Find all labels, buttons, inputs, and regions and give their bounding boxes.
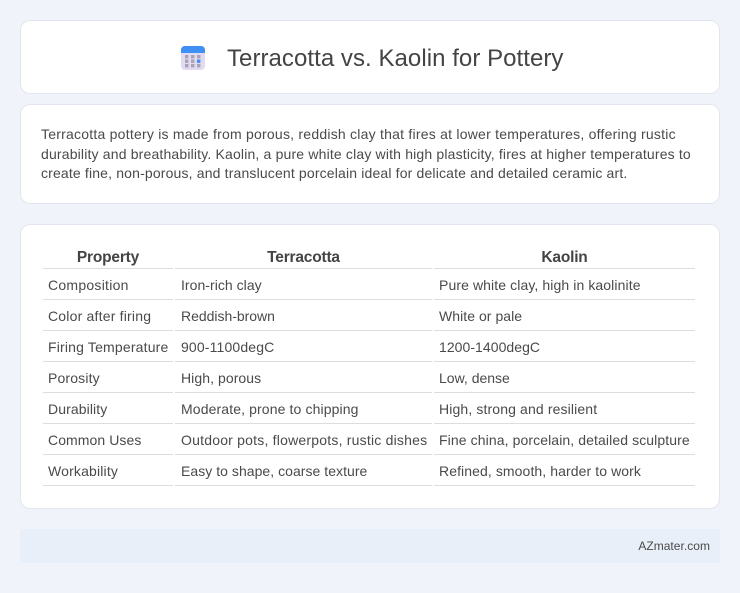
table header: Property: Property [77, 249, 139, 266]
row: Porosity: Low, dense [439, 370, 510, 386]
row: Porosity: Porosity [48, 370, 100, 386]
row: Workability: Easy to shape, coarse texture [181, 463, 367, 479]
row: Workability: Refined, smooth, harder to work [439, 463, 641, 479]
text block: summary: Terracotta pottery is made from porous, reddish clay that fires at lower temperatures, offering rustic [41, 126, 676, 142]
row: Workability: Workability [48, 463, 118, 479]
table header: Terracotta [175, 248, 432, 269]
footer bar [20, 529, 720, 563]
row: Workability [43, 463, 695, 486]
row: Porosity: High, porous [181, 370, 261, 386]
row: Durability [43, 401, 695, 424]
panel: description [20, 104, 720, 204]
row: Color after firing: Color after firing [48, 308, 151, 324]
icon: calendar grid [181, 46, 205, 70]
panel: comparison table [20, 224, 720, 509]
table header: Terracotta: Terracotta [267, 249, 340, 266]
table header: Property [43, 248, 173, 269]
row: Composition: Pure white clay, high in kaolinite [439, 277, 641, 293]
row: Durability: Moderate, prone to chipping [181, 401, 359, 417]
row: Composition: Composition [48, 277, 129, 293]
row: Color after firing [43, 308, 695, 331]
row: Composition [43, 277, 695, 300]
row: Firing Temperature: 900-1100degC [181, 339, 274, 355]
table header: Kaolin [434, 248, 695, 269]
row: Common Uses: Outdoor pots, flowerpots, rustic dishes [181, 432, 427, 448]
table header: Kaolin: Kaolin [541, 249, 588, 266]
text block: summary: create fine, non-porous, and translucent porcelain ideal for delicate and detailed ceramic art. [41, 165, 627, 181]
row: Common Uses: Fine china, porcelain, detailed sculpture [439, 432, 690, 448]
panel: title card [20, 20, 720, 94]
row: Composition: Iron-rich clay [181, 277, 262, 293]
row: Firing Temperature: Firing Temperature [48, 339, 168, 355]
text block: summary [41, 126, 691, 181]
row: Durability: High, strong and resilient [439, 401, 597, 417]
row: Common Uses: Common Uses [48, 432, 141, 448]
row: Firing Temperature [43, 339, 695, 362]
row: Color after firing: White or pale [439, 308, 522, 324]
row: Color after firing: Reddish-brown [181, 308, 275, 324]
footer text: AZmater.com: AZmater.com [638, 539, 710, 553]
title: Terracotta vs. Kaolin for Pottery [227, 45, 563, 72]
row: Porosity [43, 370, 695, 393]
row: Firing Temperature: 1200-1400degC [439, 339, 540, 355]
row: Common Uses [43, 432, 695, 455]
row: Durability: Durability [48, 401, 107, 417]
text block: summary: durability and breathability. Kaolin, a pure white clay with high plasticity, fires at higher temperatures to [41, 146, 691, 162]
